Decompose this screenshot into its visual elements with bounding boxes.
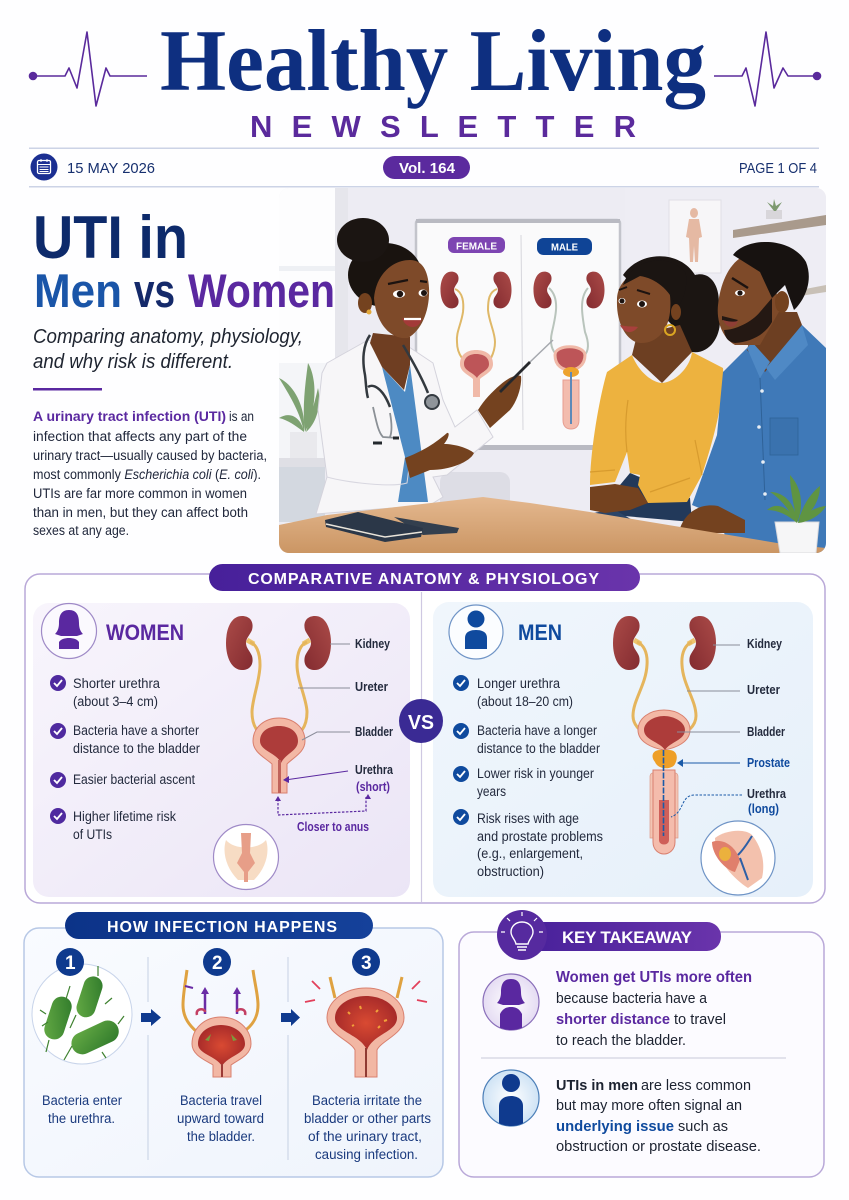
checklist: men: years xyxy=(477,784,506,799)
callout lines and labels: male: Ureter xyxy=(747,683,780,697)
man summary xyxy=(483,1070,761,1155)
diagram: male urinary tract xyxy=(613,616,716,854)
chart label: male xyxy=(537,238,592,255)
intro paragraph: UTIs are far more common in women xyxy=(33,486,247,501)
chart label: female: FEMALE xyxy=(456,240,497,252)
step captions: the bladder. xyxy=(187,1129,255,1144)
step 3: irritated bladder xyxy=(305,948,427,1077)
callout lines and labels: male: Urethra xyxy=(747,787,787,801)
panel: women xyxy=(33,603,410,897)
callout lines and labels: female: (short) xyxy=(356,780,390,794)
chart: female urinary tract xyxy=(440,272,512,397)
summary text: to travel xyxy=(674,1011,726,1028)
vs badge: VS xyxy=(408,712,434,734)
step captions: Bacteria travel xyxy=(180,1093,262,1108)
checklist: men: Longer urethra xyxy=(477,676,560,691)
step captions: Bacteria enter xyxy=(42,1093,122,1108)
checklist: men: Lower risk in younger xyxy=(477,766,594,781)
summary text: obstruction or prostate disease. xyxy=(556,1138,761,1155)
step captions: of the urinary tract, xyxy=(308,1129,422,1144)
hero illustration: doctor explaining anatomy chart to a couple xyxy=(279,188,826,553)
heading pill: KEY TAKEAWAY xyxy=(562,928,693,947)
chart label: female xyxy=(448,237,505,253)
arrow xyxy=(281,1009,300,1026)
heading pill: COMPARATIVE ANATOMY & PHYSIOLOGY xyxy=(248,571,599,588)
step number 3: 3 xyxy=(361,953,372,974)
checklist: women: Shorter urethra xyxy=(73,676,160,691)
icon: light bulb xyxy=(497,910,547,960)
icon: calendar xyxy=(30,154,58,180)
panel: key takeaway xyxy=(459,910,824,1177)
intro paragraph: sexes at any age. xyxy=(33,523,129,538)
chart: male urinary tract xyxy=(533,272,605,429)
callout lines and labels: female: Urethra xyxy=(355,763,394,777)
heartbeat line right xyxy=(714,32,820,106)
headline xyxy=(33,204,335,317)
callout lines and labels: female: Closer to anus xyxy=(297,820,369,834)
heading pill: HOW INFECTION HAPPENS xyxy=(107,919,337,936)
heading pill xyxy=(65,912,373,939)
intro paragraph: than in men, but they can affect both xyxy=(33,505,248,520)
intro paragraph xyxy=(33,409,267,538)
step captions xyxy=(42,1093,431,1162)
step number 2: 2 xyxy=(212,953,223,974)
accent rule xyxy=(33,388,102,390)
subheading: and why risk is different. xyxy=(33,351,233,373)
intro paragraph: urinary tract—usually caused by bacteria, xyxy=(33,448,267,463)
summary text: underlying issue xyxy=(556,1118,674,1135)
checklist: men: Risk rises with age xyxy=(477,811,579,826)
whiteboard xyxy=(416,219,620,450)
summary text: to reach the bladder. xyxy=(556,1032,686,1049)
checklist: men: (e.g., enlargement, xyxy=(477,846,583,861)
callout lines and labels: female: Kidney xyxy=(355,637,390,651)
heading: women: WOMEN xyxy=(106,620,184,645)
callout lines and labels: male: Prostate xyxy=(747,756,790,770)
checklist: men: Bacteria have a longer xyxy=(477,723,597,738)
woman summary xyxy=(483,969,752,1049)
date bar xyxy=(29,148,819,188)
doctor xyxy=(316,218,553,514)
step captions: the urethra. xyxy=(48,1111,115,1126)
summary text: Women get UTIs more often xyxy=(556,969,752,986)
icon: man xyxy=(483,1070,539,1128)
wall poster xyxy=(669,200,721,273)
seated woman xyxy=(590,256,724,522)
subtitle newsletter: N E W S L E T T E R xyxy=(250,109,636,144)
summary text: are less common xyxy=(641,1077,751,1094)
step 2: bacteria travelling up xyxy=(183,948,258,1077)
checklist: men: and prostate problems xyxy=(477,829,603,844)
panel: how infection happens xyxy=(24,912,443,1177)
callout lines and labels: female: Bladder xyxy=(355,725,393,739)
chart label: male: MALE xyxy=(551,242,578,254)
date: 15 MAY 2026 xyxy=(67,160,155,177)
callout lines and labels: male: (long) xyxy=(748,802,779,816)
icon: man xyxy=(449,605,503,659)
summary text: but may more often signal an xyxy=(556,1097,742,1114)
checklist: men xyxy=(453,675,603,879)
checklist: women: of UTIs xyxy=(73,827,112,842)
lower wall and bench xyxy=(279,458,510,522)
page number: PAGE 1 OF 4 xyxy=(739,160,817,177)
summary text xyxy=(556,1077,761,1155)
intro paragraph: is an xyxy=(229,409,254,424)
summary text: UTIs in men xyxy=(556,1077,638,1094)
checklist: women: distance to the bladder xyxy=(73,741,200,756)
arrow xyxy=(141,1009,161,1026)
title: Healthy Living xyxy=(160,13,706,110)
checklist: women: Higher lifetime risk xyxy=(73,809,176,824)
notebooks xyxy=(325,512,459,542)
heading pill xyxy=(522,922,721,951)
step captions: upward toward xyxy=(177,1111,264,1126)
vs badge xyxy=(399,699,443,743)
summary text: such as xyxy=(678,1118,728,1135)
inset: male pelvic view xyxy=(701,821,775,895)
wall shelf xyxy=(733,199,826,296)
volume pill xyxy=(383,156,470,179)
callout lines and labels: female xyxy=(275,637,394,834)
callout lines and labels: male: Bladder xyxy=(747,725,785,739)
masthead xyxy=(30,13,820,144)
headline: Women xyxy=(188,264,335,317)
summary text xyxy=(556,969,752,1049)
panel: men xyxy=(433,602,813,897)
intro paragraph: most commonly Escherichia coli (E. coli). xyxy=(33,467,261,482)
icon: woman xyxy=(42,604,96,658)
summary text: because bacteria have a xyxy=(556,990,708,1007)
checklist: women: Bacteria have a shorter xyxy=(73,723,199,738)
summary text: shorter distance xyxy=(556,1011,670,1028)
checklist: men: obstruction) xyxy=(477,864,544,879)
checklist: men: (about 18–20 cm) xyxy=(477,694,573,709)
background plant left xyxy=(279,363,319,459)
step captions: Bacteria irritate the xyxy=(312,1093,422,1108)
callout lines and labels: female: Ureter xyxy=(355,680,388,694)
step captions: causing infection. xyxy=(315,1147,418,1162)
subheading: Comparing anatomy, physiology, xyxy=(33,326,303,348)
step captions: bladder or other parts xyxy=(304,1111,431,1126)
heartbeat line left xyxy=(30,32,147,106)
seated man xyxy=(680,242,826,553)
wooden table xyxy=(279,497,826,553)
diagram: female urinary tract xyxy=(226,616,331,793)
checklist: women xyxy=(50,675,200,842)
intro paragraph: infection that affects any part of the xyxy=(33,429,247,444)
callout lines and labels: male: Kidney xyxy=(747,637,782,651)
inset: female pelvic view xyxy=(214,824,278,890)
volume pill: Vol. 164 xyxy=(399,160,456,177)
headline: vs xyxy=(134,264,175,317)
callout lines and labels: male xyxy=(671,637,790,817)
checklist: women: (about 3–4 cm) xyxy=(73,694,158,709)
headline: UTI in xyxy=(33,204,188,271)
checklist: women: Easier bacterial ascent xyxy=(73,772,195,787)
headline: Men xyxy=(34,264,122,317)
potted plant right xyxy=(767,475,826,553)
subheading xyxy=(33,326,303,373)
checklist: men: distance to the bladder xyxy=(477,741,600,756)
heading: men: MEN xyxy=(518,620,562,645)
heading pill xyxy=(209,564,640,591)
panel: comparative anatomy and physiology xyxy=(25,564,825,903)
icon: woman xyxy=(483,974,539,1032)
intro paragraph: A urinary tract infection (UTI) xyxy=(33,409,226,424)
step 1: bacteria xyxy=(32,948,132,1064)
step number 1: 1 xyxy=(65,953,76,974)
